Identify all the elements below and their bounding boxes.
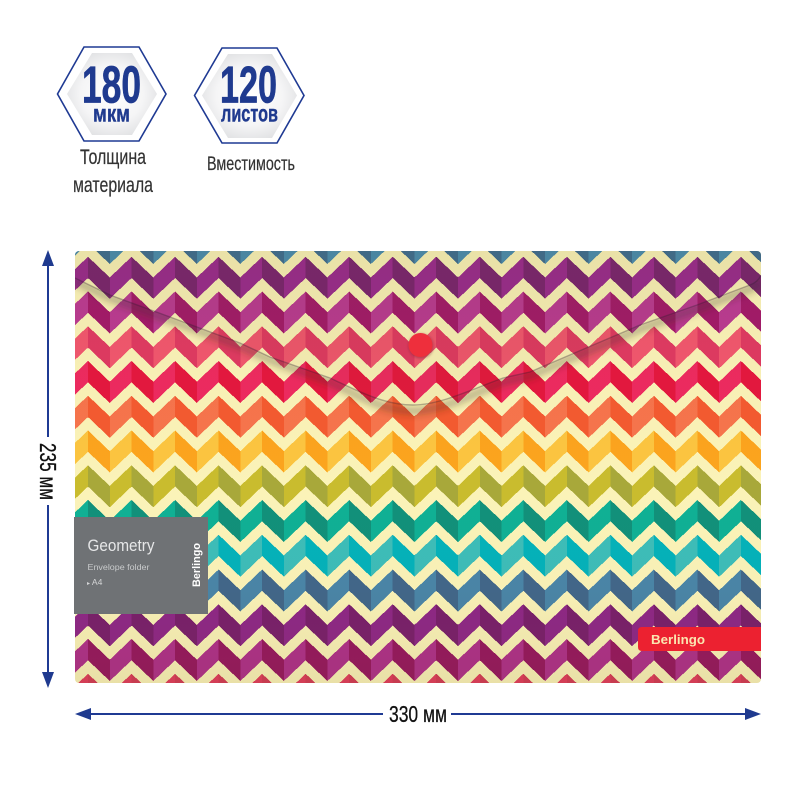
chevron pattern [75,251,761,683]
hexagon inner fill [202,54,297,138]
value 120: 120 [220,57,277,115]
hexagon inner fill [67,53,157,135]
unit: листов [221,101,278,127]
envelope flap [75,251,761,411]
red brand tab [638,627,761,651]
label format: ▸ A4 [87,577,103,587]
hexagon frame [194,48,304,143]
label subtitle: Envelope folder [88,562,150,572]
unit: мкм [93,101,130,127]
arrow: height dimension [35,250,61,688]
panel: envelope folder [74,251,761,683]
width label: 330 мм [389,701,447,727]
caption: Вместимость [207,154,295,175]
badge: capacity 120 sheets [194,48,304,175]
brand name: Berlingo [651,632,705,647]
label brand: Berlingo [191,543,203,587]
grey product label [74,517,208,614]
caption line 1: Толщина [80,146,146,169]
value 180: 180 [82,57,141,115]
arrow: width dimension [75,701,761,727]
hexagon frame [58,47,166,141]
caption line 2: материала [73,174,153,197]
height label: 235 мм [35,443,61,500]
label title: Geometry [88,537,155,555]
badge: material thickness 180 microns [58,47,166,197]
snap button [408,333,434,358]
